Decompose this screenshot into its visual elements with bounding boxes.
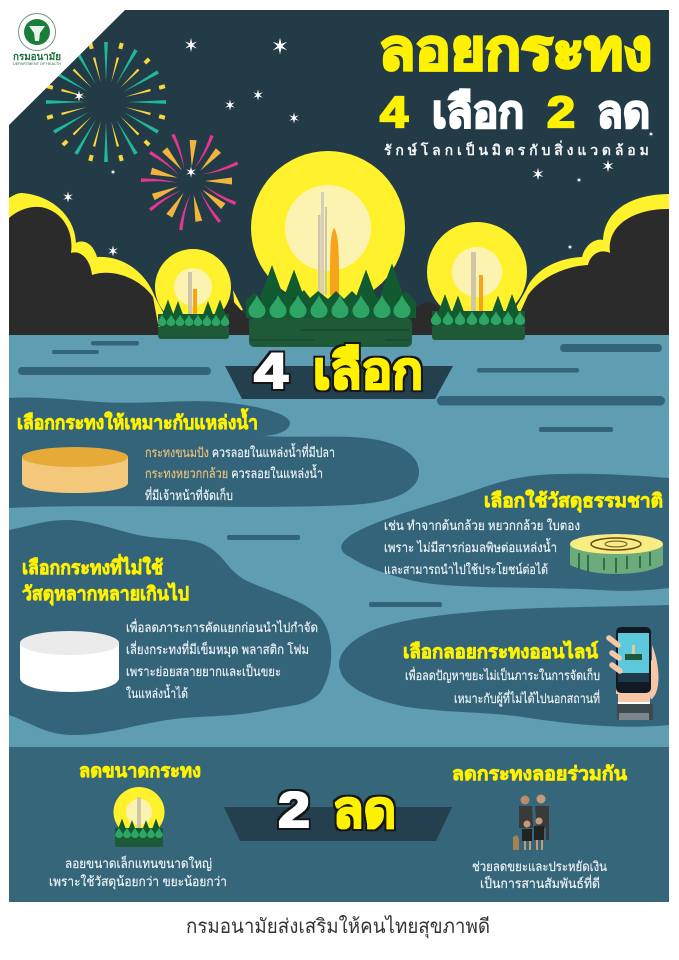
icon: bread krathong bbox=[22, 447, 128, 493]
panel: online krathong bbox=[339, 605, 669, 727]
heading: 4 choices: เลือก bbox=[313, 343, 423, 399]
heading: 2 reduce: 2 bbox=[278, 782, 310, 838]
logo text: DEPARTMENT OF HEALTH bbox=[13, 62, 62, 66]
heading: fewer krathongs: ลดกระทงลอยร่วมกัน bbox=[452, 764, 627, 785]
icon: family bbox=[513, 794, 549, 850]
body text: ในแหล่งน้ำได้ bbox=[126, 684, 188, 701]
body text: เพราะย่อยสลายยากและเป็นขยะ bbox=[126, 662, 281, 679]
subtitle: 4 choose 2 reduce: เลือก bbox=[432, 88, 524, 137]
body text right: ช่วยลดขยะและประหยัดเงิน bbox=[472, 859, 607, 874]
water bbox=[9, 335, 669, 748]
heading: เลือกกระทงให้เหมาะกับแหล่งน้ำ bbox=[17, 408, 258, 434]
firework: pink and orange bbox=[141, 134, 238, 230]
logo text: กรมอนามัย bbox=[13, 51, 61, 63]
body text left: ลอยขนาดเล็กแทนขนาดใหญ่ bbox=[65, 854, 212, 871]
heading bbox=[22, 554, 189, 606]
stars bbox=[63, 38, 653, 279]
large krathong lantern bbox=[246, 151, 416, 347]
panel: 2 reduce bbox=[9, 747, 669, 902]
icon: department logo bbox=[18, 14, 56, 50]
heading: เลือกลอยกระทงออนไลน์ bbox=[403, 640, 598, 663]
heading: เลือกกระทงที่ไม่ใช้ bbox=[22, 554, 163, 579]
middle hills bbox=[160, 290, 460, 335]
heading: smaller krathong: ลดขนาดกระทง bbox=[79, 761, 201, 782]
corner logo panel bbox=[9, 10, 125, 125]
body text: เพื่อลดภาระการคัดแยกก่อนนำไปกำจัด bbox=[126, 619, 318, 635]
title: ลอยกระทง bbox=[379, 18, 652, 81]
water ripple bars bbox=[18, 341, 665, 607]
tagline: รักษ์โลกเป็นมิตรกับสิ่งแวดล้อม bbox=[384, 140, 652, 158]
heading: เลือกใช้วัสดุธรรมชาติ bbox=[484, 489, 663, 513]
heading: วัสดุหลากหลายเกินไป bbox=[22, 582, 189, 606]
subtitle: 4 choose 2 reduce bbox=[380, 88, 650, 137]
right hill with glow bbox=[500, 194, 669, 335]
body text: กระทงหยวกกล้วย ควรลอยในแหล่งน้ำ bbox=[145, 464, 323, 481]
heading: 2 reduce bbox=[278, 782, 396, 838]
left hill with glow bbox=[9, 193, 175, 335]
ribbon bbox=[224, 807, 452, 841]
icon: small krathong bbox=[114, 787, 164, 847]
subtitle: 4 choose 2 reduce: ลด bbox=[597, 88, 650, 137]
body text: เลี่ยงกระทงที่มีเข็มหมุด พลาสติก โฟม bbox=[126, 640, 309, 658]
body text right: เป็นการสานสัมพันธ์ที่ดี bbox=[480, 874, 600, 891]
heading: 4 choices bbox=[254, 343, 423, 399]
heading: 2 reduce: ลด bbox=[333, 782, 396, 838]
ribbon: 4 choices bbox=[225, 366, 453, 399]
body text right bbox=[472, 859, 607, 891]
body text: เหมาะกับผู้ที่ไม่ได้ไปนอกสถานที่ bbox=[454, 690, 600, 707]
krathong base bbox=[249, 318, 412, 347]
body text bbox=[145, 443, 335, 503]
candles bbox=[318, 192, 339, 295]
body text: กระทงขนมปัง ควรลอยในแหล่งน้ำที่มีปลา bbox=[145, 443, 335, 460]
panel: natural materials bbox=[341, 474, 669, 591]
body text left: เพราะใช้วัสดุน้อยกว่า ขยะน้อยกว่า bbox=[49, 874, 227, 890]
heading: 4 choices: 4 bbox=[254, 343, 288, 399]
body text bbox=[405, 666, 600, 707]
footer slogan: กรมอนามัยส่งเสริมให้คนไทยสุขภาพดี bbox=[186, 915, 490, 939]
body text: เพราะ ไม่มีสารก่อมลพิษต่อแหล่งน้ำ bbox=[384, 538, 557, 555]
body text left bbox=[49, 854, 227, 890]
body text: และสามารถนำไปใช้ประโยชน์ต่อได้ bbox=[384, 562, 548, 577]
icon: hand holding phone bbox=[609, 627, 659, 720]
body text bbox=[126, 619, 318, 701]
body text: เช่น ทำจากต้นกล้วย หยวกกล้วย ใบตอง bbox=[384, 518, 580, 533]
body text: เพื่อลดปัญหาขยะไม่เป็นภาระในการจัดเก็บ bbox=[405, 666, 600, 683]
panel: suit the water source bbox=[9, 397, 419, 508]
small left krathong lantern bbox=[155, 249, 231, 339]
body text: ที่มีเจ้าหน้าที่จัดเก็บ bbox=[145, 486, 233, 503]
subtitle: 4 choose 2 reduce: 4 bbox=[380, 88, 409, 137]
krathong leaves bbox=[246, 264, 416, 318]
small right krathong lantern bbox=[427, 222, 527, 340]
firework: teal and yellow bbox=[46, 42, 166, 162]
icon: foam krathong bbox=[20, 631, 119, 692]
subtitle: 4 choose 2 reduce: 2 bbox=[547, 88, 575, 137]
sky background bbox=[9, 10, 669, 336]
body text bbox=[384, 518, 580, 577]
icon: banana trunk krathong bbox=[570, 534, 663, 574]
panel: avoid mixed materials bbox=[9, 520, 331, 735]
